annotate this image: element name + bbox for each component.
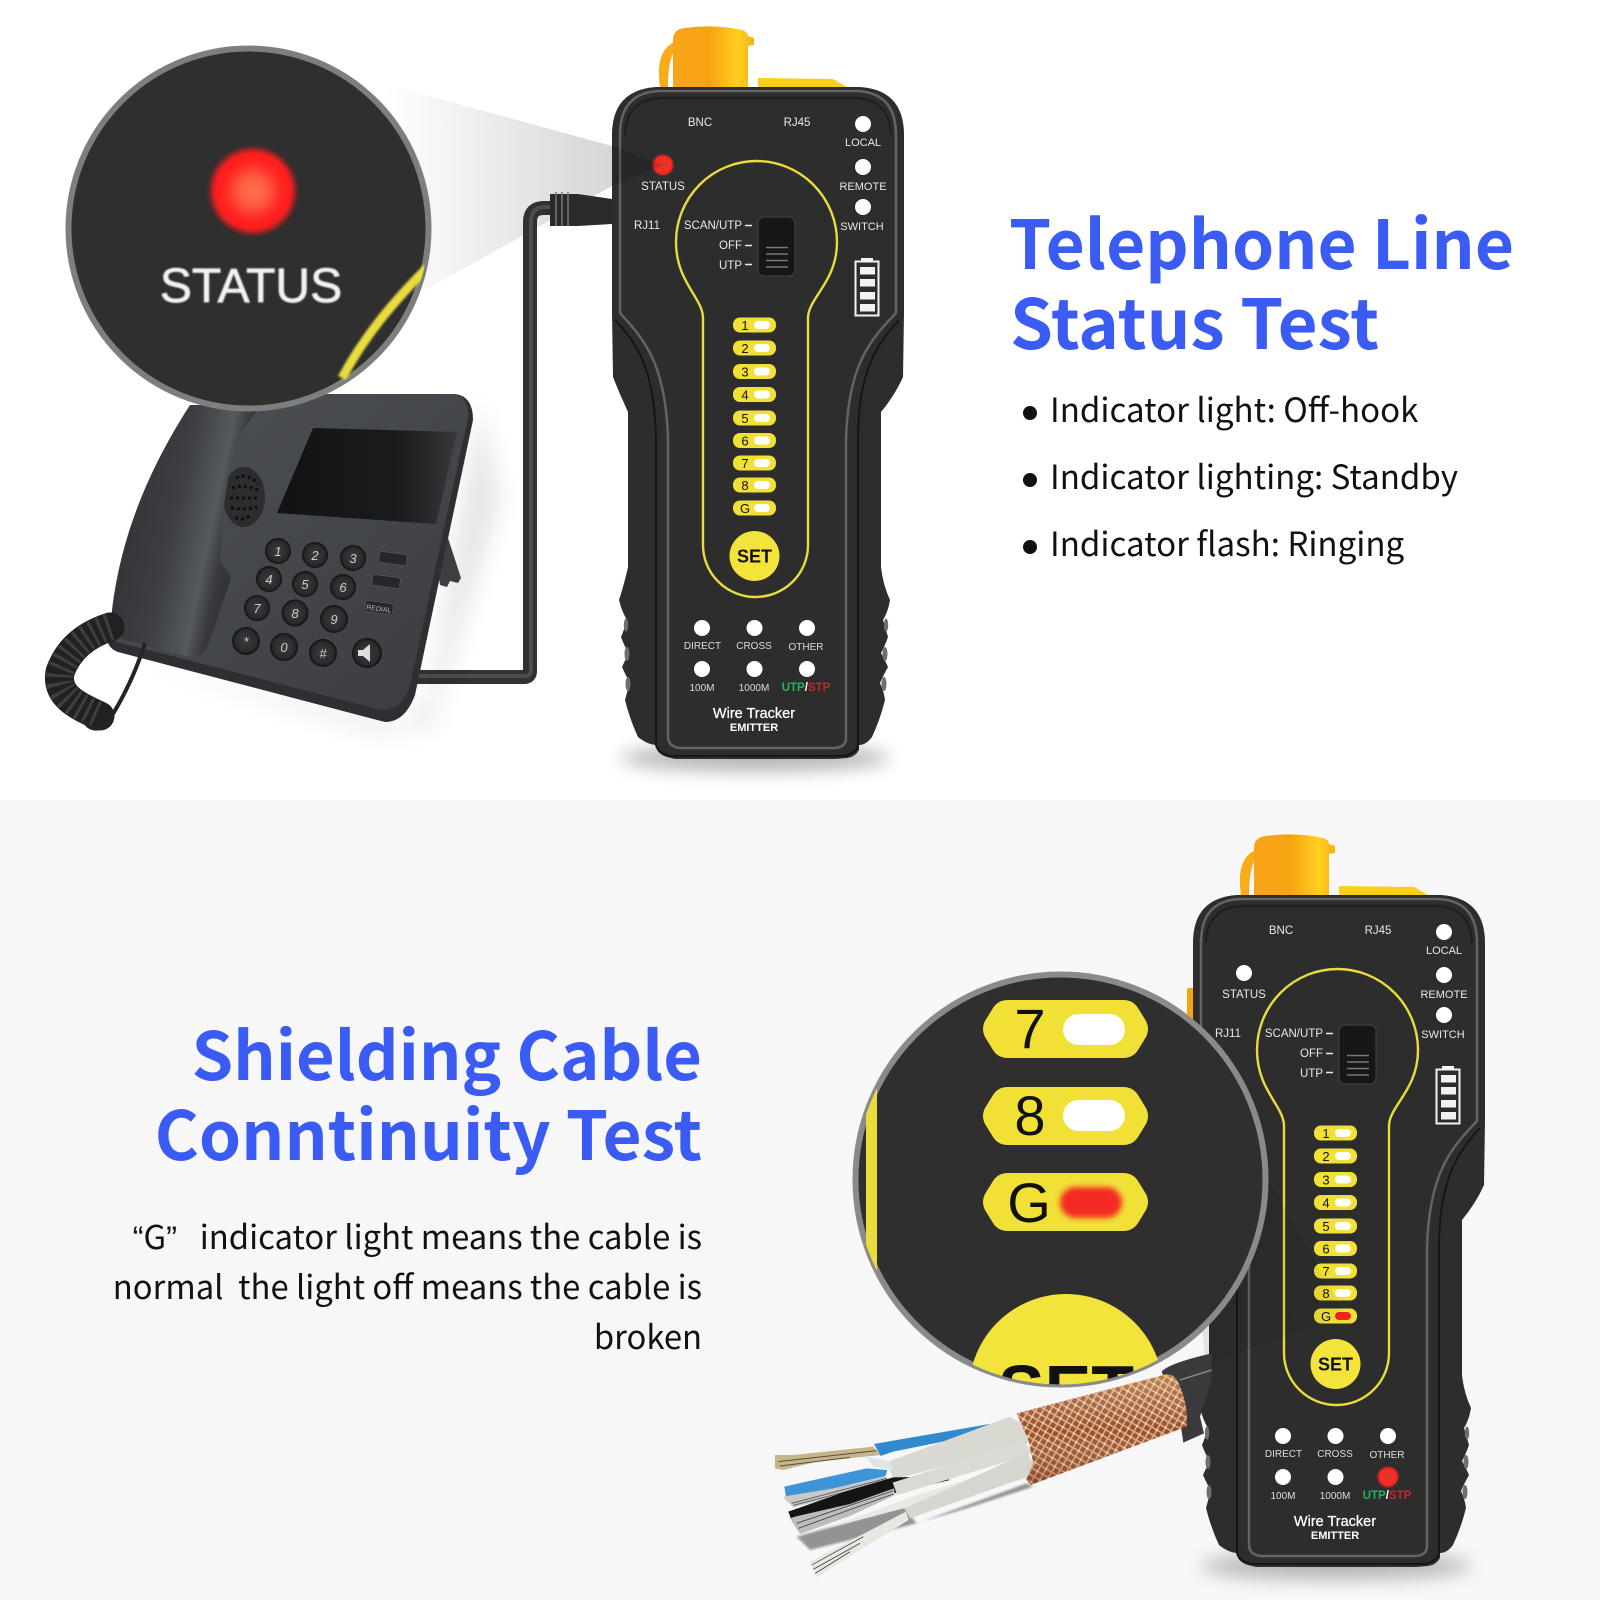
- lower labels: UTP/STP: [1363, 1490, 1412, 1502]
- lens indicator G lit red: G: [1007, 1171, 1051, 1234]
- device name: Wire Tracker: [1294, 1514, 1376, 1530]
- pair indicators 1-8 and G (G lit red): 7: [1322, 1264, 1330, 1279]
- phone keypad: 3: [349, 551, 357, 566]
- top labels: RJ11: [1215, 1028, 1241, 1040]
- phone keypad: #: [319, 646, 327, 661]
- top labels: BNC: [688, 117, 712, 129]
- phone keypad: *: [243, 634, 249, 649]
- G indicator magnifier lens: [852, 972, 1268, 1388]
- lens yellow outline: [866, 1080, 877, 1280]
- device name: Wire Tracker: [713, 706, 795, 722]
- top labels: BNC: [1269, 925, 1293, 937]
- top labels: STATUS: [641, 181, 685, 193]
- BNC cap: [659, 26, 754, 87]
- description paragraph: broken: [594, 1312, 702, 1359]
- bullet list: [1023, 384, 1458, 566]
- lower labels: DIRECT: [684, 641, 721, 652]
- phone keypad: 9: [330, 612, 338, 627]
- phone keypad: 8: [291, 606, 299, 621]
- phone keypad: 1: [274, 544, 282, 559]
- pair indicators 1-8 and G (G lit red): 5: [1322, 1219, 1330, 1234]
- lower labels: [684, 641, 831, 694]
- yellow keyhole outline: [676, 161, 837, 597]
- top labels: REMOTE: [839, 181, 887, 193]
- pair indicators 1-8 and G (G lit red): 3: [1322, 1172, 1330, 1188]
- lens SET button: SET: [998, 1351, 1134, 1429]
- heading: shielding cable test: Shielding Cable: [192, 1004, 702, 1100]
- yellow RJ45 cover: [1339, 886, 1428, 895]
- pale inner wire: [867, 1457, 893, 1470]
- lower labels: CROSS: [1317, 1449, 1353, 1460]
- slide switch: [684, 217, 795, 276]
- phone keypad: 4: [265, 572, 273, 587]
- SET button: [730, 531, 780, 581]
- lower labels: 1000M: [739, 683, 769, 694]
- lower labels: [1265, 1449, 1412, 1502]
- cable braid shield: [1017, 1374, 1187, 1485]
- slide switch: [1265, 1025, 1376, 1084]
- top indicator lights: [855, 116, 871, 215]
- phone keypad: 2: [310, 548, 319, 563]
- pair indicators 1-8 and G (G lit red): 2: [1322, 1149, 1330, 1164]
- lower labels: 100M: [689, 683, 715, 694]
- phone keypad: 5: [301, 577, 309, 592]
- phone base: [106, 394, 473, 722]
- top labels: [634, 117, 887, 233]
- pair indicators 1-8 and G: 2: [741, 341, 749, 356]
- pair indicators 1-8 and G (G lit red): 8: [1322, 1286, 1330, 1301]
- white wire one: [886, 1417, 1033, 1479]
- SET button: SET: [1318, 1354, 1353, 1374]
- lens indicator G lit red: [983, 1171, 1148, 1234]
- cable: telephone line from phone to emitter: [415, 192, 612, 677]
- heading: shielding cable test: Conntinuity Test: [155, 1083, 702, 1180]
- top labels: [1215, 925, 1468, 1041]
- emitter device: bottom: [1187, 834, 1485, 1579]
- phone stand: [436, 538, 461, 587]
- pair indicators 1-8 and G (G lit red): 1: [1322, 1126, 1330, 1141]
- phone handset: [112, 405, 262, 657]
- lens indicator 8: 8: [1014, 1084, 1046, 1147]
- cable shadow: [797, 1483, 1033, 1550]
- lens status label: STATUS: [160, 260, 342, 313]
- pair indicators 1-8 and G (G lit red): 4: [1322, 1196, 1330, 1210]
- phone side buttons: REDIAL: [366, 604, 392, 615]
- device name: EMITTER: [1311, 1530, 1359, 1542]
- heading: telephone line status test: Telephone Line: [1009, 192, 1514, 289]
- blue flat wire: [784, 1468, 887, 1497]
- device shadow: [620, 745, 890, 771]
- grip highlights: [1205, 1426, 1469, 1499]
- silver strand one: [783, 1476, 889, 1507]
- pair indicators 1-8 and G: 4: [741, 388, 749, 402]
- lens indicator 8: [983, 1084, 1148, 1147]
- top labels: RJ45: [784, 117, 810, 129]
- pair indicators 1-8 and G: 7: [741, 456, 749, 471]
- lens red light: [211, 149, 295, 233]
- heading: telephone line status test: Status Test: [1010, 269, 1379, 369]
- RJ11 side cap: [1187, 988, 1195, 1020]
- lens indicator 7: [983, 997, 1148, 1060]
- slide switch: SCAN/UTP: [684, 220, 742, 232]
- pair indicators 1-8 and G (G lit red): G: [1321, 1309, 1331, 1324]
- pair indicators 1-8 and G: [733, 318, 776, 516]
- heading: telephone line status test: [1009, 192, 1514, 369]
- white wire two: [893, 1441, 1033, 1495]
- background: lower section: [0, 800, 1600, 1600]
- device body: [1193, 895, 1485, 1567]
- phone screen: [277, 428, 457, 524]
- lower labels: 100M: [1270, 1491, 1296, 1502]
- device name: [713, 706, 795, 734]
- phone keypad: 0: [280, 640, 288, 655]
- lower labels: 1000M: [1320, 1491, 1350, 1502]
- pair indicators 1-8 and G: G: [740, 501, 750, 516]
- battery icon: [1436, 1066, 1460, 1124]
- lower labels: OTHER: [788, 642, 824, 653]
- telephone: [59, 394, 500, 735]
- slide switch: OFF: [719, 240, 742, 252]
- device bezel lines: [615, 91, 899, 756]
- silver strand two: [790, 1488, 895, 1534]
- device bezel lines: [1196, 899, 1480, 1564]
- pale wire bundle: [827, 1460, 1033, 1528]
- status light callout darkening on device: [612, 146, 663, 186]
- top labels: REMOTE: [1420, 989, 1468, 1001]
- callout wedge: status lens to indicator: [385, 84, 612, 290]
- lower labels: OTHER: [1370, 1450, 1404, 1461]
- lower labels: CROSS: [736, 641, 772, 652]
- UTP/STP light: red: [1378, 1467, 1398, 1487]
- bullet list: Indicator flash: Ringing: [1050, 518, 1405, 566]
- device shadow: [1201, 1553, 1471, 1579]
- heading: shielding cable test: [155, 1004, 702, 1180]
- black wire: [788, 1477, 950, 1521]
- device body: [612, 87, 904, 759]
- yellow keyhole outline: [1257, 969, 1418, 1405]
- status light: red: [653, 155, 673, 175]
- white wire three: [905, 1453, 1036, 1518]
- device name: EMITTER: [730, 722, 778, 734]
- pair indicators 1-8 and G: 3: [741, 364, 749, 380]
- device name: [1294, 1514, 1376, 1542]
- top labels: LOCAL: [1426, 945, 1462, 957]
- bottom fine strand: [810, 1512, 909, 1577]
- status magnifier lens: [68, 48, 428, 408]
- yellow RJ45 cover: [758, 78, 847, 87]
- phone keypad: 7: [253, 601, 261, 616]
- phone shadow: [130, 400, 500, 735]
- phone side buttons: [364, 551, 408, 615]
- pair indicators 1-8 and G: 1: [741, 318, 749, 333]
- top indicator lights: [1236, 924, 1452, 1023]
- description paragraph: “G” indicator light means the cable is: [133, 1212, 702, 1259]
- slide switch: SCAN/UTP: [1265, 1028, 1323, 1040]
- shielded cable: [775, 1353, 1212, 1577]
- emitter device: top: [612, 26, 904, 771]
- SET button: [1310, 1339, 1360, 1389]
- top labels: LOCAL: [845, 137, 881, 149]
- lower indicator lights: [1275, 1428, 1396, 1485]
- battery icon: [856, 258, 878, 316]
- description paragraph: normal the light off means the cable is: [113, 1262, 702, 1309]
- top labels: STATUS: [1222, 989, 1266, 1001]
- lower labels: DIRECT: [1265, 1449, 1302, 1460]
- description paragraph: [113, 1212, 702, 1359]
- slide switch: UTP: [719, 260, 742, 272]
- top labels: RJ11: [634, 220, 660, 232]
- cable jacket: [1162, 1353, 1212, 1443]
- pair indicators 1-8 and G: 5: [741, 411, 749, 426]
- copper strand: [775, 1447, 881, 1470]
- SET button: SET: [737, 546, 772, 566]
- lower labels: UTP/STP: [782, 682, 831, 694]
- lens SET button: [972, 1294, 1158, 1384]
- top labels: SWITCH: [840, 221, 884, 233]
- phone keypad: [232, 538, 382, 668]
- lens yellow outline: [342, 268, 427, 378]
- blue wire: [874, 1420, 1017, 1456]
- grip highlights: [624, 618, 888, 691]
- bullet list: Indicator light: Off-hook: [1050, 384, 1418, 432]
- BNC cap: [1240, 834, 1335, 895]
- callout wedge: G indicator to lens: [1180, 1020, 1345, 1365]
- phone coil cord: [59, 627, 145, 729]
- pair indicators 1-8 and G: 8: [741, 478, 749, 493]
- phone keypad: 6: [339, 580, 347, 595]
- lens indicator 7: 7: [1014, 997, 1046, 1060]
- top labels: RJ45: [1365, 925, 1391, 937]
- bullet list: Indicator lighting: Standby: [1050, 451, 1458, 499]
- pair indicators 1-8 and G (G lit red): 6: [1322, 1242, 1330, 1256]
- top labels: SWITCH: [1421, 1029, 1465, 1041]
- phone speaker: [223, 467, 265, 527]
- lower indicator lights: [694, 620, 815, 677]
- pair indicators 1-8 and G (G lit red): [1314, 1126, 1357, 1324]
- slide switch: UTP: [1300, 1068, 1323, 1080]
- slide switch: OFF: [1300, 1048, 1323, 1060]
- pair indicators 1-8 and G: 6: [741, 434, 749, 448]
